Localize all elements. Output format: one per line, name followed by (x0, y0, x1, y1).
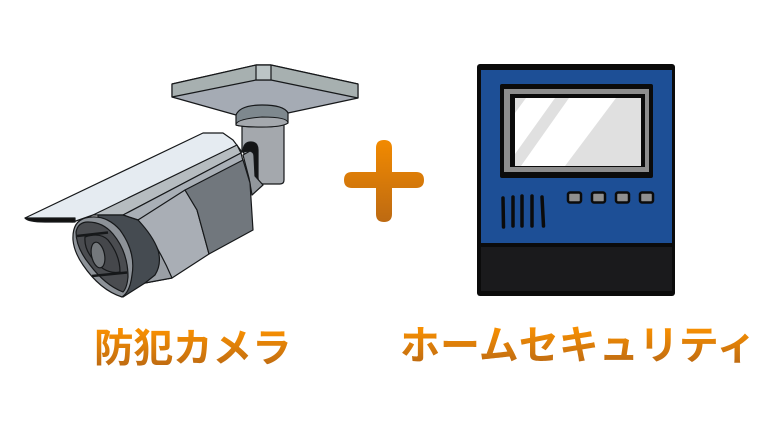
plus sign (344, 140, 424, 222)
buttons (568, 192, 653, 202)
lens hood (73, 215, 159, 297)
ceiling mount plate (172, 65, 358, 115)
icon: home security monitor (477, 64, 675, 296)
speaker grille (503, 196, 544, 227)
camera body (123, 153, 253, 283)
label: home security: ホームセキュリティ (400, 324, 756, 368)
visor (25, 133, 242, 222)
label: security camera: 防犯カメラ (94, 327, 292, 371)
icon: security camera (25, 65, 358, 297)
screen (500, 84, 653, 178)
monitor housing (477, 64, 675, 296)
mount post (236, 105, 288, 195)
